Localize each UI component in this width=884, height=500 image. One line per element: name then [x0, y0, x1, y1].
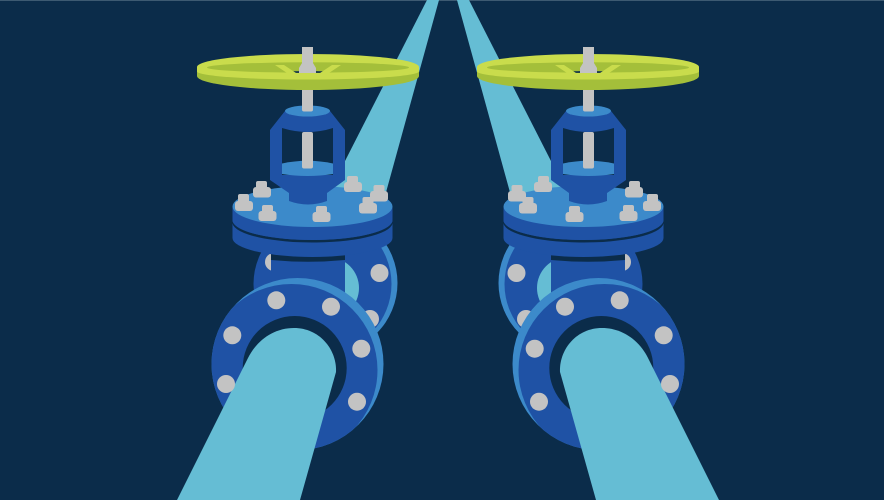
lower flange disc	[232, 218, 393, 257]
valve neck	[271, 245, 345, 315]
right valve	[457, 0, 719, 500]
upper flange disc	[232, 186, 392, 240]
rear flange	[498, 245, 642, 332]
bonnet yoke	[270, 106, 345, 204]
front flange	[206, 278, 384, 456]
valve stem lower	[583, 85, 594, 168]
left valve	[177, 0, 439, 500]
front flange bolts	[217, 291, 370, 411]
flange bolts, front row	[258, 197, 377, 222]
front pipe	[177, 328, 336, 500]
back pipe	[457, 0, 566, 196]
handwheel	[197, 47, 419, 90]
front flange bolts	[526, 291, 679, 411]
bonnet yoke	[551, 106, 626, 204]
valve stem lower	[302, 85, 313, 168]
valve neck	[551, 245, 625, 315]
rear flange	[254, 245, 398, 332]
upper flange disc	[504, 186, 664, 240]
front flange	[512, 278, 690, 456]
lower flange disc	[503, 218, 664, 257]
front pipe	[560, 328, 719, 500]
flange bolts, back row	[508, 176, 661, 211]
handwheel	[477, 47, 699, 90]
back pipe	[330, 0, 439, 196]
flange bolts, back row	[235, 176, 388, 211]
flange bolts, front row	[519, 197, 638, 222]
